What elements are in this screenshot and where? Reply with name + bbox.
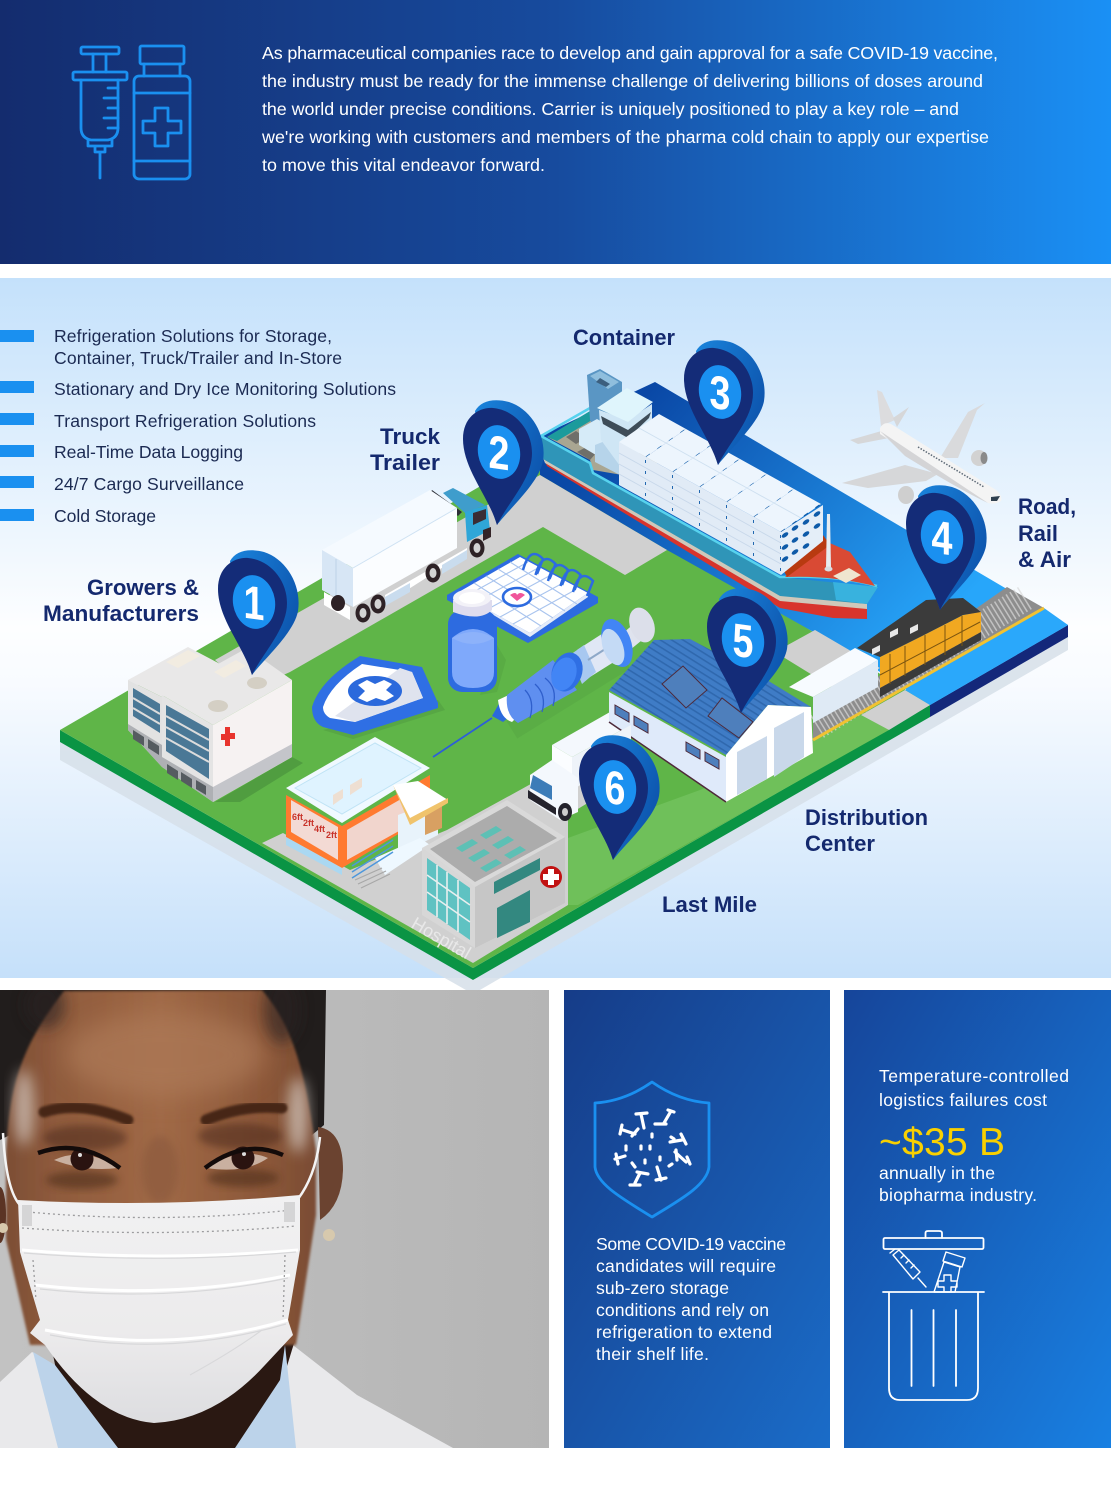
map stage labels: Container bbox=[573, 325, 675, 350]
manufacturing building bbox=[128, 647, 303, 802]
hair bbox=[0, 990, 326, 1140]
retail store: 4ft bbox=[314, 824, 325, 834]
giant syringe bbox=[433, 604, 659, 757]
funnel bbox=[587, 369, 622, 430]
retail store: 2ft bbox=[326, 830, 337, 840]
text block: cost tail: annually in the bbox=[879, 1163, 995, 1183]
containers bbox=[619, 414, 823, 575]
pin 1: 1 bbox=[244, 576, 264, 631]
text block: intro paragraph: to move this vital endeavor forward. bbox=[262, 155, 545, 175]
delivery truck bbox=[528, 725, 631, 821]
pin 4: 4 bbox=[932, 511, 953, 566]
legend: Container, Truck/Trailer and In-Store bbox=[54, 348, 342, 368]
retail store: 2ft bbox=[303, 818, 314, 828]
face bbox=[0, 976, 343, 1345]
panel: sub-zero storage bbox=[564, 990, 830, 1448]
photo: masked healthcare worker bbox=[0, 976, 549, 1448]
legend: Transport Refrigeration Solutions bbox=[54, 411, 316, 431]
retail store: 6ft bbox=[292, 812, 303, 822]
pin 5: 5 bbox=[733, 614, 753, 669]
panel: header banner bbox=[0, 0, 1111, 264]
pin 1 bbox=[218, 550, 299, 675]
map stage labels bbox=[43, 325, 1076, 917]
train bbox=[789, 598, 981, 723]
red bow deck bbox=[785, 540, 875, 586]
map stage labels: Distribution bbox=[805, 805, 928, 830]
airplane bbox=[842, 390, 1001, 504]
text block: sub-zero storage: refrigeration to extend bbox=[596, 1322, 772, 1342]
map stage labels: & Air bbox=[1018, 547, 1071, 572]
railway track bbox=[813, 587, 1044, 740]
lab coat and collar bbox=[0, 1340, 453, 1448]
hospital: Hospital bbox=[408, 913, 474, 963]
icon: shield with virus bbox=[595, 1082, 709, 1217]
pin 3: 3 bbox=[710, 366, 730, 421]
legend: Real-Time Data Logging bbox=[54, 442, 243, 462]
calendar bbox=[447, 554, 598, 643]
pin 3 bbox=[684, 340, 765, 465]
map stage labels: Manufacturers bbox=[43, 601, 199, 626]
text block: intro paragraph: As pharmaceutical companies race to develop and gain approval for a safe COVID-19 vaccine, bbox=[262, 43, 998, 63]
icon: trash can with vaccine bbox=[883, 1231, 984, 1400]
superstructure bbox=[579, 419, 620, 458]
stat: 35 billion: ~$35 B bbox=[879, 1121, 1005, 1164]
pin 6 bbox=[579, 735, 660, 860]
text block: intro paragraph: the world under precise conditions. Carrier is uniquely positioned to play a key role – and bbox=[262, 99, 959, 119]
text block: intro paragraph: we're working with customers and members of the pharma cold chain to apply our expertise bbox=[261, 127, 989, 147]
hull bbox=[545, 462, 867, 619]
icon: vaccine vial bbox=[134, 46, 190, 179]
container ship bbox=[540, 369, 878, 619]
text block: cost lead bbox=[879, 1066, 1069, 1110]
pin 5 bbox=[707, 588, 788, 713]
pin 2: 2 bbox=[489, 426, 509, 481]
map stage labels: Center bbox=[805, 831, 875, 856]
pin 2 bbox=[463, 400, 544, 525]
map stage labels: Rail bbox=[1018, 521, 1058, 546]
retail store bbox=[286, 737, 448, 888]
text block: intro paragraph bbox=[261, 43, 998, 175]
road trailer truck bbox=[322, 488, 491, 622]
text block: cost tail bbox=[879, 1163, 1037, 1205]
map stage labels: Trailer bbox=[370, 450, 440, 475]
panel: cold chain map bbox=[0, 278, 1111, 994]
text block: cost lead: logistics failures cost bbox=[879, 1090, 1047, 1110]
map stage labels: Truck bbox=[380, 424, 441, 449]
stern deck bbox=[547, 412, 660, 478]
distribution warehouse bbox=[552, 639, 813, 802]
text block: cost tail: biopharma industry. bbox=[879, 1185, 1037, 1205]
isometric platform bbox=[60, 382, 1068, 994]
eyebrows bbox=[44, 1107, 282, 1120]
eyes bbox=[38, 1146, 283, 1170]
surgical mask bbox=[18, 1195, 300, 1423]
legend: Stationary and Dry Ice Monitoring Solutions bbox=[54, 379, 396, 399]
map stage labels: Growers & bbox=[87, 575, 199, 600]
panel: logistics failures cost bbox=[844, 990, 1111, 1448]
text block: sub-zero storage bbox=[596, 1234, 786, 1364]
legend bbox=[0, 326, 396, 526]
icon: syringe bbox=[73, 47, 127, 178]
text block: sub-zero storage: candidates will require bbox=[596, 1256, 776, 1276]
text block: sub-zero storage: sub-zero storage bbox=[596, 1278, 729, 1298]
legend: 24/7 Cargo Surveillance bbox=[54, 474, 244, 494]
text block: cost lead: Temperature-controlled bbox=[879, 1066, 1069, 1086]
legend: Refrigeration Solutions for Storage, bbox=[54, 326, 332, 346]
pin 6: 6 bbox=[605, 761, 625, 816]
shield with cross bbox=[312, 656, 445, 739]
mast and cargo bbox=[826, 514, 831, 568]
text block: sub-zero storage: conditions and rely on bbox=[596, 1300, 769, 1320]
text block: sub-zero storage: Some COVID-19 vaccine bbox=[596, 1234, 786, 1254]
map stage labels: Road, bbox=[1018, 494, 1076, 519]
text block: sub-zero storage: their shelf life. bbox=[596, 1344, 709, 1364]
text block: intro paragraph: the industry must be ready for the immense challenge of delivering billions of doses around bbox=[262, 71, 983, 91]
map stage labels: Last Mile bbox=[662, 892, 757, 917]
legend: Cold Storage bbox=[54, 506, 156, 526]
vaccine bottle bbox=[448, 589, 506, 695]
pin 4 bbox=[906, 485, 987, 610]
hospital bbox=[408, 800, 565, 963]
